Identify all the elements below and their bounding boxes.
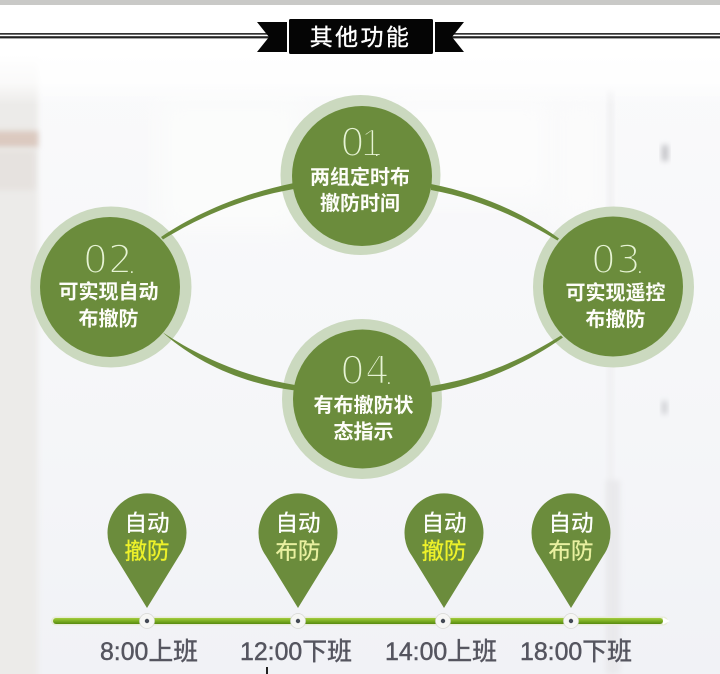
marker 1: 8:00: 8:00上班	[100, 638, 198, 666]
marker 1: 8:00: 自动	[124, 511, 170, 536]
marker 3: 14:00	[385, 493, 497, 666]
node 01: 两组定时布	[310, 165, 410, 189]
node 04: 有布撤防状	[314, 394, 414, 417]
node 04: 态指示	[334, 420, 394, 444]
node 03: 可实现遥控	[566, 280, 666, 304]
connecting curves	[161, 183, 563, 392]
marker 4: 18:00: 自动	[548, 511, 594, 536]
marker 3: 14:00: 自动	[421, 511, 467, 536]
marker 1: 8:00: 撤防	[124, 539, 170, 564]
top photo strip	[0, 0, 720, 5]
node 04: 04.	[340, 349, 391, 394]
marker 4: 18:00: 布防	[548, 539, 594, 564]
node 03: 布撤防	[586, 308, 646, 331]
marker 2: 12:00: 12:00下班	[240, 638, 352, 666]
title banner	[0, 19, 720, 54]
node 02	[30, 206, 192, 368]
marker 1: 8:00	[100, 493, 198, 666]
marker 2: 12:00: 自动	[275, 511, 321, 536]
timeline bar	[51, 616, 670, 626]
marker 3: 14:00: 14:00上班	[385, 638, 497, 666]
node 01	[280, 95, 440, 255]
node 04	[282, 319, 442, 479]
node 01: 撤防时间	[320, 192, 400, 215]
marker 2: 12:00	[240, 493, 352, 666]
marker 2: 12:00: 布防	[275, 539, 321, 564]
node 03: 03.	[591, 238, 642, 283]
marker 3: 14:00: 撤防	[421, 539, 467, 564]
node 01: 01.	[340, 121, 383, 166]
node 03	[533, 206, 694, 368]
node 02: 可实现自动	[58, 280, 158, 304]
heading: 其他功能	[310, 24, 411, 50]
marker 4: 18:00	[520, 493, 632, 666]
node 02: 02.	[83, 238, 134, 283]
marker 4: 18:00: 18:00下班	[520, 638, 632, 666]
node 02: 布撤防	[78, 308, 138, 330]
